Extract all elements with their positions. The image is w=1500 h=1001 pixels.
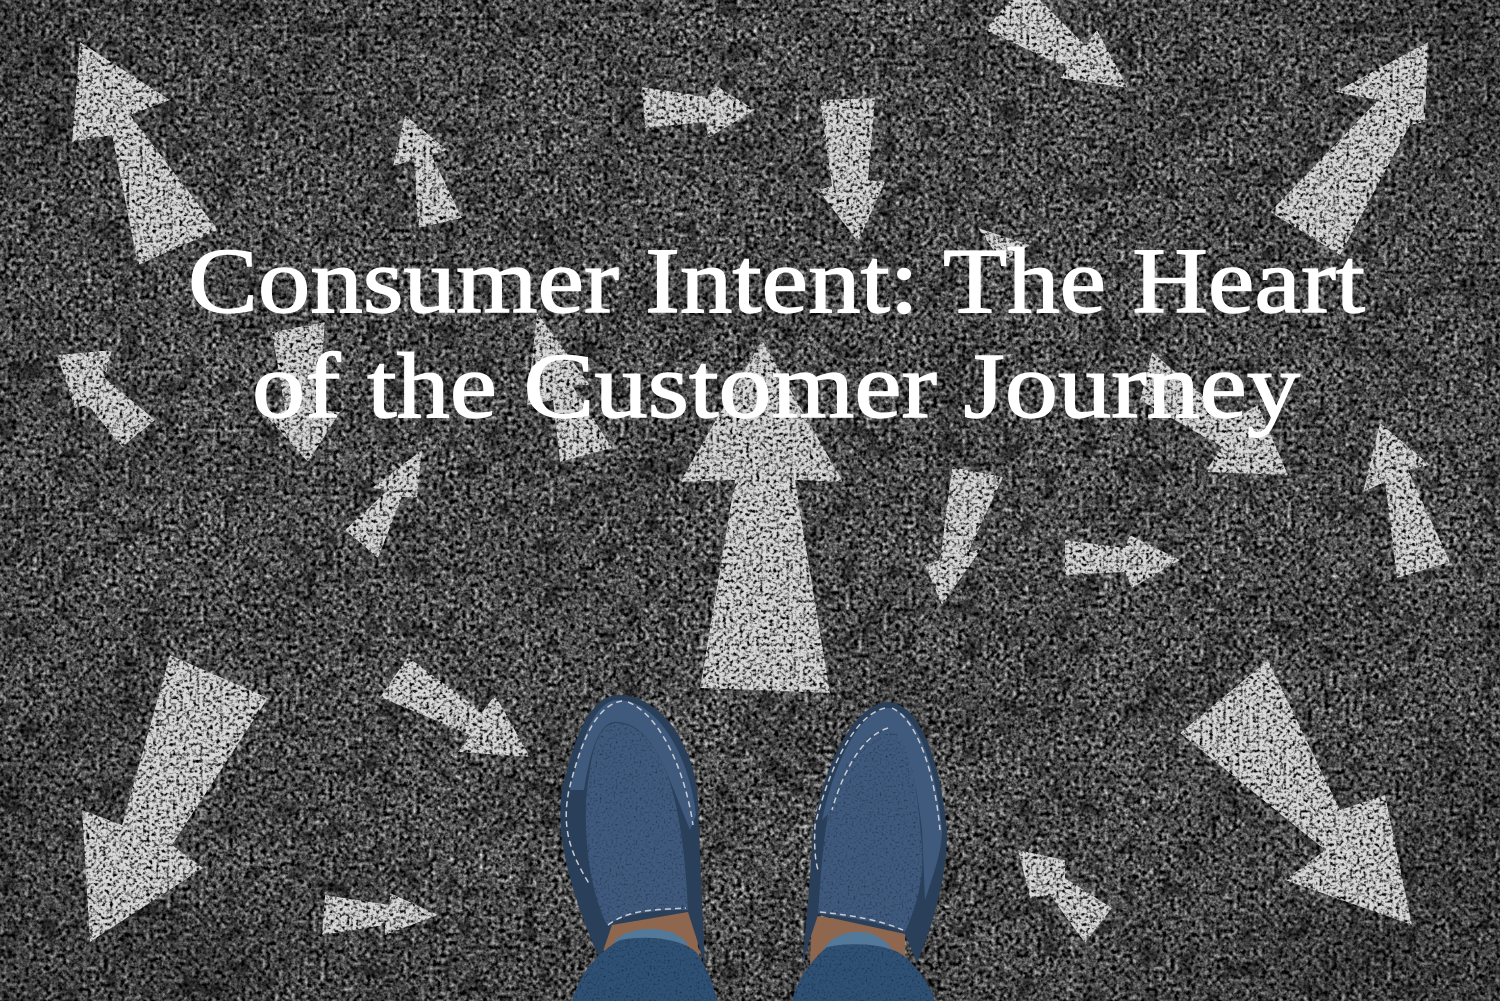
arrow: bottom right large	[1180, 660, 1412, 925]
title	[188, 230, 1365, 438]
arrow: central large pointing up	[680, 340, 843, 693]
left jeans	[572, 929, 717, 1001]
left shoe	[560, 695, 705, 965]
arrow: lower left pointing right	[380, 657, 530, 757]
arrow: small left centre	[345, 450, 422, 558]
arrow: behind title right	[1140, 352, 1288, 475]
left foot skin	[598, 905, 700, 960]
arrow: top left large	[72, 42, 218, 265]
right shoe	[802, 702, 947, 963]
arrow: far right small	[1363, 423, 1450, 578]
arrow: centre right pointing down	[925, 467, 1003, 605]
arrow: behind title left, pointing down	[268, 322, 340, 462]
arrow: bottom left small	[322, 893, 438, 935]
title line 1: Consumer Intent: The Heart	[188, 230, 1365, 333]
title line 2: of the Customer Journey	[252, 335, 1301, 438]
arrow: bottom left large	[82, 655, 268, 942]
arrow: centre right pointing right	[1065, 535, 1180, 588]
right foot skin	[810, 915, 905, 965]
arrow: small upper left	[393, 115, 462, 228]
arrow: top centre pointing down	[818, 98, 885, 242]
arrow: small behind title	[978, 228, 1030, 262]
arrow: far left small	[57, 350, 155, 447]
arrow: top right large	[1270, 42, 1428, 255]
arrow: behind title centre left	[527, 313, 612, 462]
right jeans	[792, 932, 935, 1001]
feet: shoes and jeans	[560, 695, 947, 1001]
arrow: bottom right small	[1018, 850, 1112, 943]
arrow: top centre pointing right	[642, 85, 755, 138]
arrow: top edge pointing lower right	[985, 0, 1128, 88]
